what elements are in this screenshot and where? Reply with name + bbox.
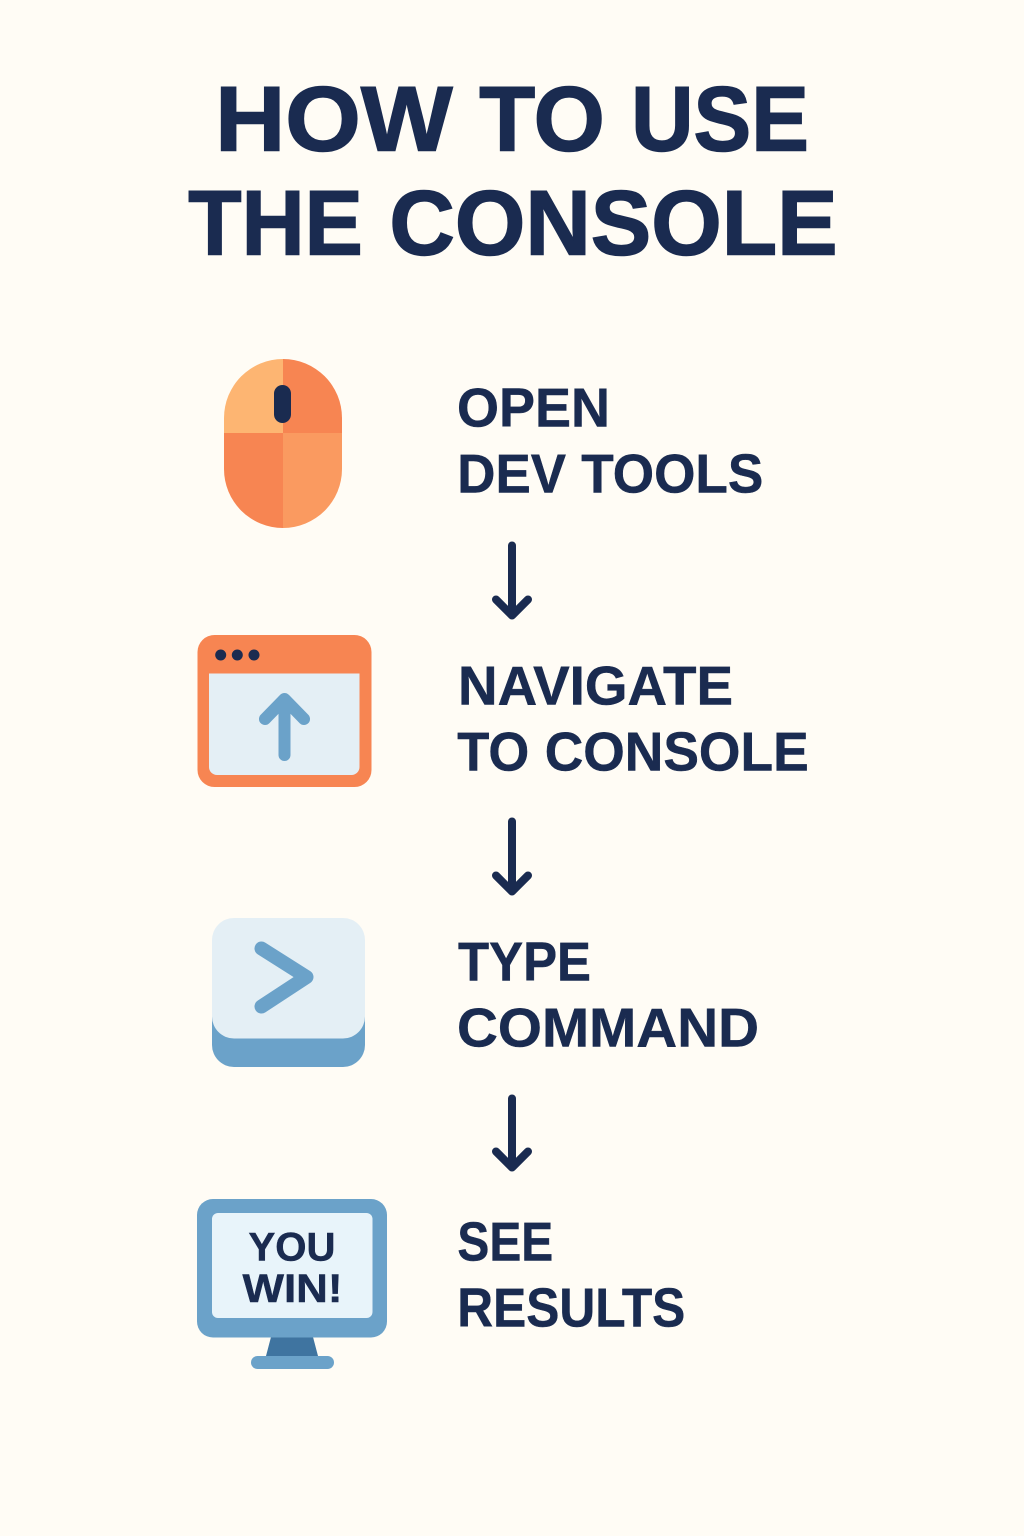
label: navigate to console: NAVIGATE [458, 654, 733, 716]
icon: keyboard key [212, 918, 365, 1067]
label: open dev tools: DEV [457, 442, 566, 504]
label: navigate to console: CONSOLE [545, 720, 809, 782]
step 1: open dev tools [224, 359, 763, 528]
icon: browser window [198, 635, 372, 787]
title: TO [479, 68, 605, 170]
label: open dev tools: TOOLS [581, 442, 763, 504]
label: navigate to console: TO [457, 720, 529, 782]
label: type command: COMMAND [457, 996, 759, 1058]
step 2: navigate to console [198, 635, 809, 787]
title: CONSOLE [389, 172, 838, 274]
icon: mouse [224, 359, 342, 528]
label: type command [457, 930, 759, 1058]
label: navigate to console [457, 654, 809, 782]
label: see results [457, 1210, 685, 1338]
title: USE [631, 68, 809, 170]
step 3: type command [212, 918, 759, 1067]
arrow 2 [496, 822, 528, 892]
title [188, 68, 838, 274]
label: see results: SEE [457, 1210, 553, 1272]
monitor text: you win: YOU [248, 1226, 336, 1270]
title: THE [188, 172, 363, 274]
label: open dev tools [457, 376, 763, 504]
title: HOW [215, 68, 453, 170]
label: see results: RESULTS [457, 1276, 685, 1338]
arrow 1 [496, 546, 528, 616]
arrow 3 [496, 1098, 528, 1168]
step 4: see results [197, 1199, 685, 1369]
label: open dev tools: OPEN [457, 376, 610, 438]
monitor text: you win [242, 1226, 342, 1311]
label: type command: TYPE [458, 930, 591, 992]
monitor text: you win: WIN! [242, 1267, 342, 1311]
icon: monitor [197, 1199, 387, 1369]
